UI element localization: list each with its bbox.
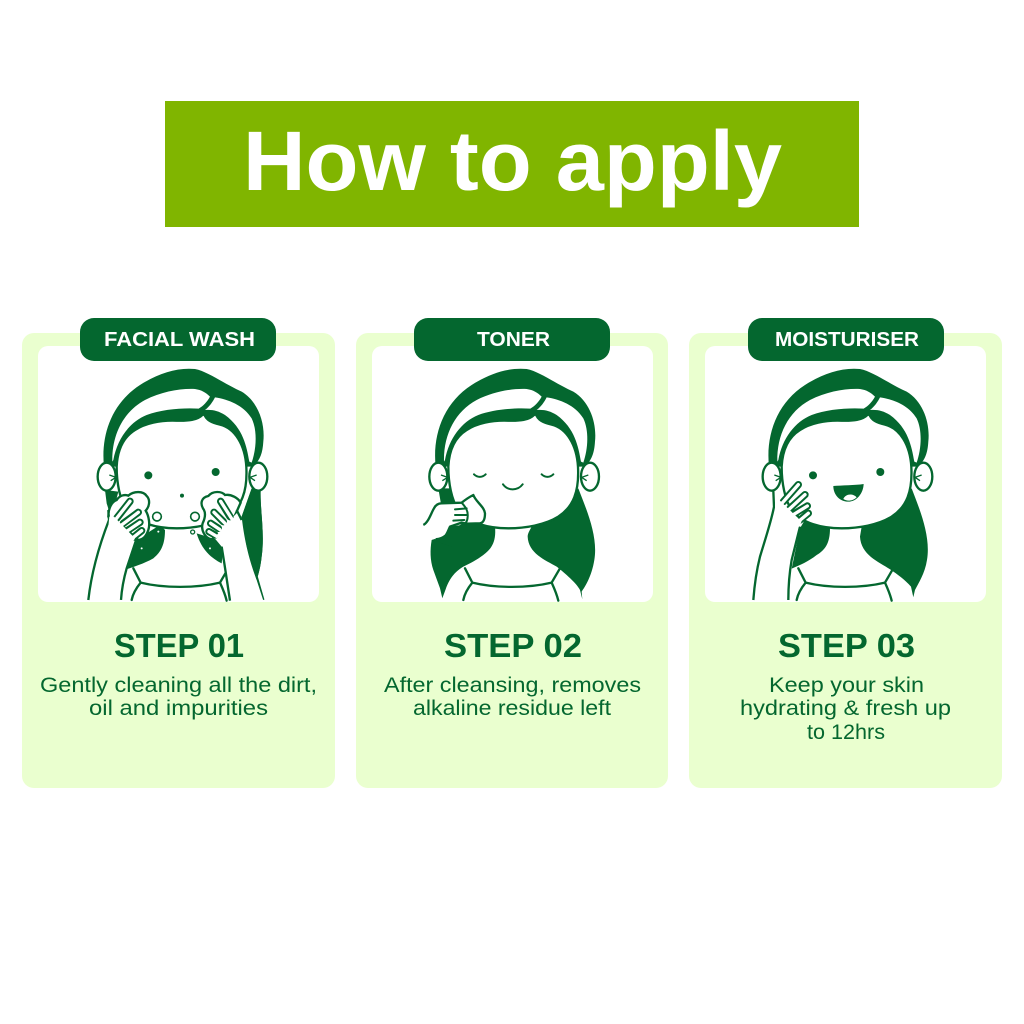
step title: STEP 02: [444, 627, 582, 664]
step title: STEP 01: [114, 627, 244, 664]
step description: Keep your skin: [769, 674, 924, 697]
panel: step 3 moisturiser: [689, 318, 1002, 788]
step description: alkaline residue left: [413, 697, 611, 720]
step description: [384, 674, 641, 720]
step description: [740, 674, 951, 744]
illustration: girl washing face: [88, 369, 267, 601]
foam right: [202, 492, 241, 539]
left arm and hand: [88, 513, 137, 600]
step description: hydrating & fresh up: [740, 697, 951, 720]
step description: oil and impurities: [89, 697, 268, 720]
pill label: moisturiser: [748, 318, 944, 361]
step description: After cleansing, removes: [384, 674, 641, 697]
illustration: girl applying moisturiser: [753, 369, 932, 601]
right arm and hand: [213, 512, 263, 601]
step description: [40, 674, 317, 720]
hand with cotton pad: [423, 495, 485, 539]
pill label: facial wash: FACIAL WASH: [104, 329, 255, 351]
pill label: facial wash: [80, 318, 276, 361]
title banner: [165, 101, 859, 227]
foam left: [108, 492, 149, 540]
heading: How to apply: How to apply: [243, 114, 782, 208]
step title: STEP 03: [778, 627, 915, 664]
arm and hand: [753, 492, 800, 600]
pill label: toner: [414, 318, 610, 361]
pill label: toner: TONER: [477, 329, 551, 351]
step description: to 12hrs: [807, 721, 885, 744]
pill label: moisturiser: MOISTURISER: [775, 329, 920, 351]
panel: step 2 toner: [356, 318, 668, 788]
panel: step 1 facial wash: [22, 318, 335, 788]
illustration: girl applying toner: [423, 369, 599, 601]
step description: Gently cleaning all the dirt,: [40, 674, 317, 697]
